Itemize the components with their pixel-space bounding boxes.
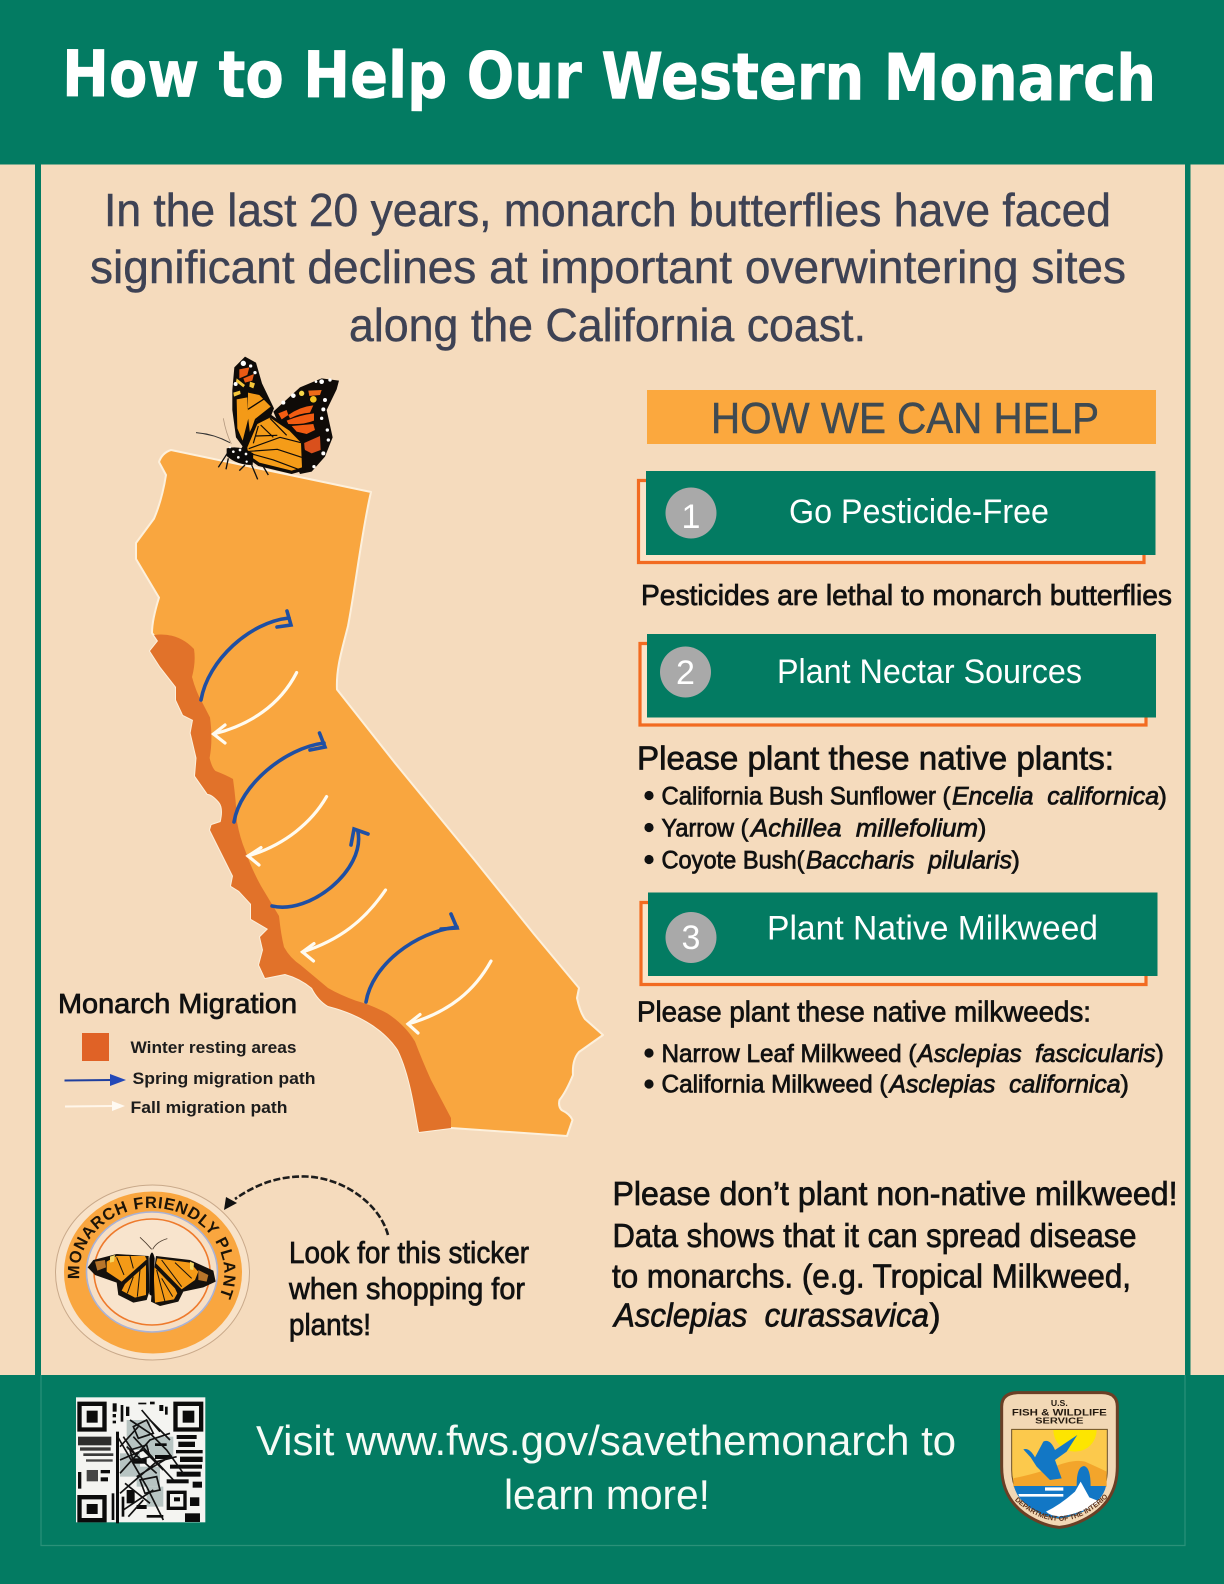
- legend: monarch migration: Fall migration path: [130, 1098, 288, 1117]
- list: native plants: [637, 740, 1167, 874]
- list: native milkweeds: Please plant these native milkweeds:: [637, 996, 1091, 1028]
- text: non-native milkweed warning: to monarchs. (e.g. Tropical Milkweed,: [612, 1258, 1131, 1294]
- list: native milkweeds: ): [1120, 1070, 1129, 1098]
- arrow: dashed pointer to sticker: [224, 1176, 388, 1235]
- icon: monarch butterfly on map: [196, 357, 339, 479]
- legend: monarch migration: Spring migration path: [132, 1069, 316, 1088]
- list: native plants: Coyote Bush(: [662, 846, 805, 874]
- panel: footer band: [0, 1375, 1224, 1584]
- text: look for this sticker: [288, 1235, 529, 1342]
- sticker: monarch friendly plant: [55, 1184, 250, 1360]
- panel: header band: [0, 0, 1224, 164]
- rear wing: [273, 378, 339, 474]
- list: native milkweeds: Narrow Leaf Milkweed (: [662, 1040, 917, 1068]
- step 3: plant native milkweed: Plant Native Milkweed: [767, 910, 1098, 948]
- step 1: go pesticide-free: Go Pesticide-Free: [789, 493, 1049, 531]
- list: native plants: Baccharis pilularis: [806, 846, 1012, 874]
- hind wing: [241, 414, 306, 474]
- step 1: go pesticide-free: [638, 471, 1156, 562]
- text: look for this sticker: plants!: [289, 1307, 371, 1342]
- text: non-native milkweed warning: ): [930, 1296, 940, 1334]
- body: [227, 447, 253, 465]
- footer call to action: [256, 1417, 956, 1518]
- icon: fish and wildlife service shield: [1000, 1391, 1119, 1529]
- legend: monarch migration: [58, 988, 316, 1117]
- spring migration arrows: [201, 611, 457, 1002]
- sticker: monarch friendly plant: MONARCH FRIENDLY PLANT: [68, 1196, 236, 1300]
- text: look for this sticker: Look for this sticker: [289, 1235, 529, 1270]
- text: pesticides caption: Pesticides are lethal to monarch butterflies: [641, 580, 1172, 612]
- icon: fish and wildlife service shield: FISH & WILDLIFE: [1012, 1407, 1107, 1417]
- state outline: [136, 450, 603, 1136]
- step 2: plant nectar sources: 2: [676, 654, 695, 692]
- front wing: [232, 357, 274, 447]
- legend: monarch migration: Winter resting areas: [130, 1038, 296, 1057]
- list: native plants: Yarrow (: [662, 814, 749, 842]
- list: native milkweeds: [637, 996, 1164, 1098]
- step 3: plant native milkweed: 3: [682, 919, 700, 957]
- icon: sticker butterfly: [88, 1237, 216, 1306]
- list: native plants: ): [978, 814, 986, 842]
- text: non-native milkweed warning: Please don’t plant non-native milkweed!: [612, 1175, 1178, 1212]
- text: non-native milkweed warning: [612, 1175, 1178, 1334]
- list: native milkweeds: ): [1156, 1040, 1164, 1068]
- icon: qr code: [76, 1397, 205, 1523]
- list: native plants: California Bush Sunflower (: [662, 782, 951, 810]
- list: native plants: Encelia californica: [952, 782, 1159, 810]
- fall migration arrows: [214, 673, 491, 1033]
- icon: fish and wildlife service shield: DEPARTMENT OF THE INTERIOR: [1015, 1494, 1107, 1521]
- intro text: In the last 20 years, monarch butterflies have faced: [104, 184, 1111, 236]
- list: native milkweeds: California Milkweed (: [662, 1070, 888, 1098]
- legend: monarch migration: Monarch Migration: [58, 988, 297, 1019]
- list: native plants: ): [1012, 846, 1020, 874]
- list: native plants: Achillea millefolium: [749, 814, 978, 842]
- step 1: go pesticide-free: 1: [682, 498, 700, 536]
- winter resting areas: [150, 635, 451, 1132]
- text: look for this sticker: when shopping for: [288, 1271, 525, 1306]
- footer call to action: Visit www.fws.gov/savethemonarch to: [256, 1417, 956, 1464]
- text: non-native milkweed warning: Data shows that it can spread disease: [612, 1217, 1136, 1254]
- list: native milkweeds: Asclepias californica: [888, 1070, 1121, 1098]
- step 2: plant nectar sources: Plant Nectar Sources: [777, 653, 1082, 691]
- step 3: plant native milkweed: [641, 892, 1158, 984]
- intro text: [90, 184, 1126, 351]
- list: native plants: Please plant these native plants:: [637, 740, 1114, 776]
- california migration map: [136, 450, 603, 1136]
- intro text: along the California coast.: [349, 299, 866, 351]
- list: native milkweeds: Asclepias fascicularis: [916, 1040, 1156, 1068]
- list: native plants: ): [1158, 782, 1167, 810]
- heading: how we can help: HOW WE CAN HELP: [711, 394, 1099, 443]
- footer call to action: learn more!: [504, 1471, 710, 1518]
- icon: fish and wildlife service shield: SERVICE: [1035, 1417, 1084, 1426]
- intro text: significant declines at important overwintering sites: [90, 241, 1126, 293]
- text: non-native milkweed warning: Asclepias curassavica: [612, 1296, 929, 1334]
- step 2: plant nectar sources: [640, 634, 1156, 725]
- icon: fish and wildlife service shield: U.S.: [1051, 1398, 1068, 1408]
